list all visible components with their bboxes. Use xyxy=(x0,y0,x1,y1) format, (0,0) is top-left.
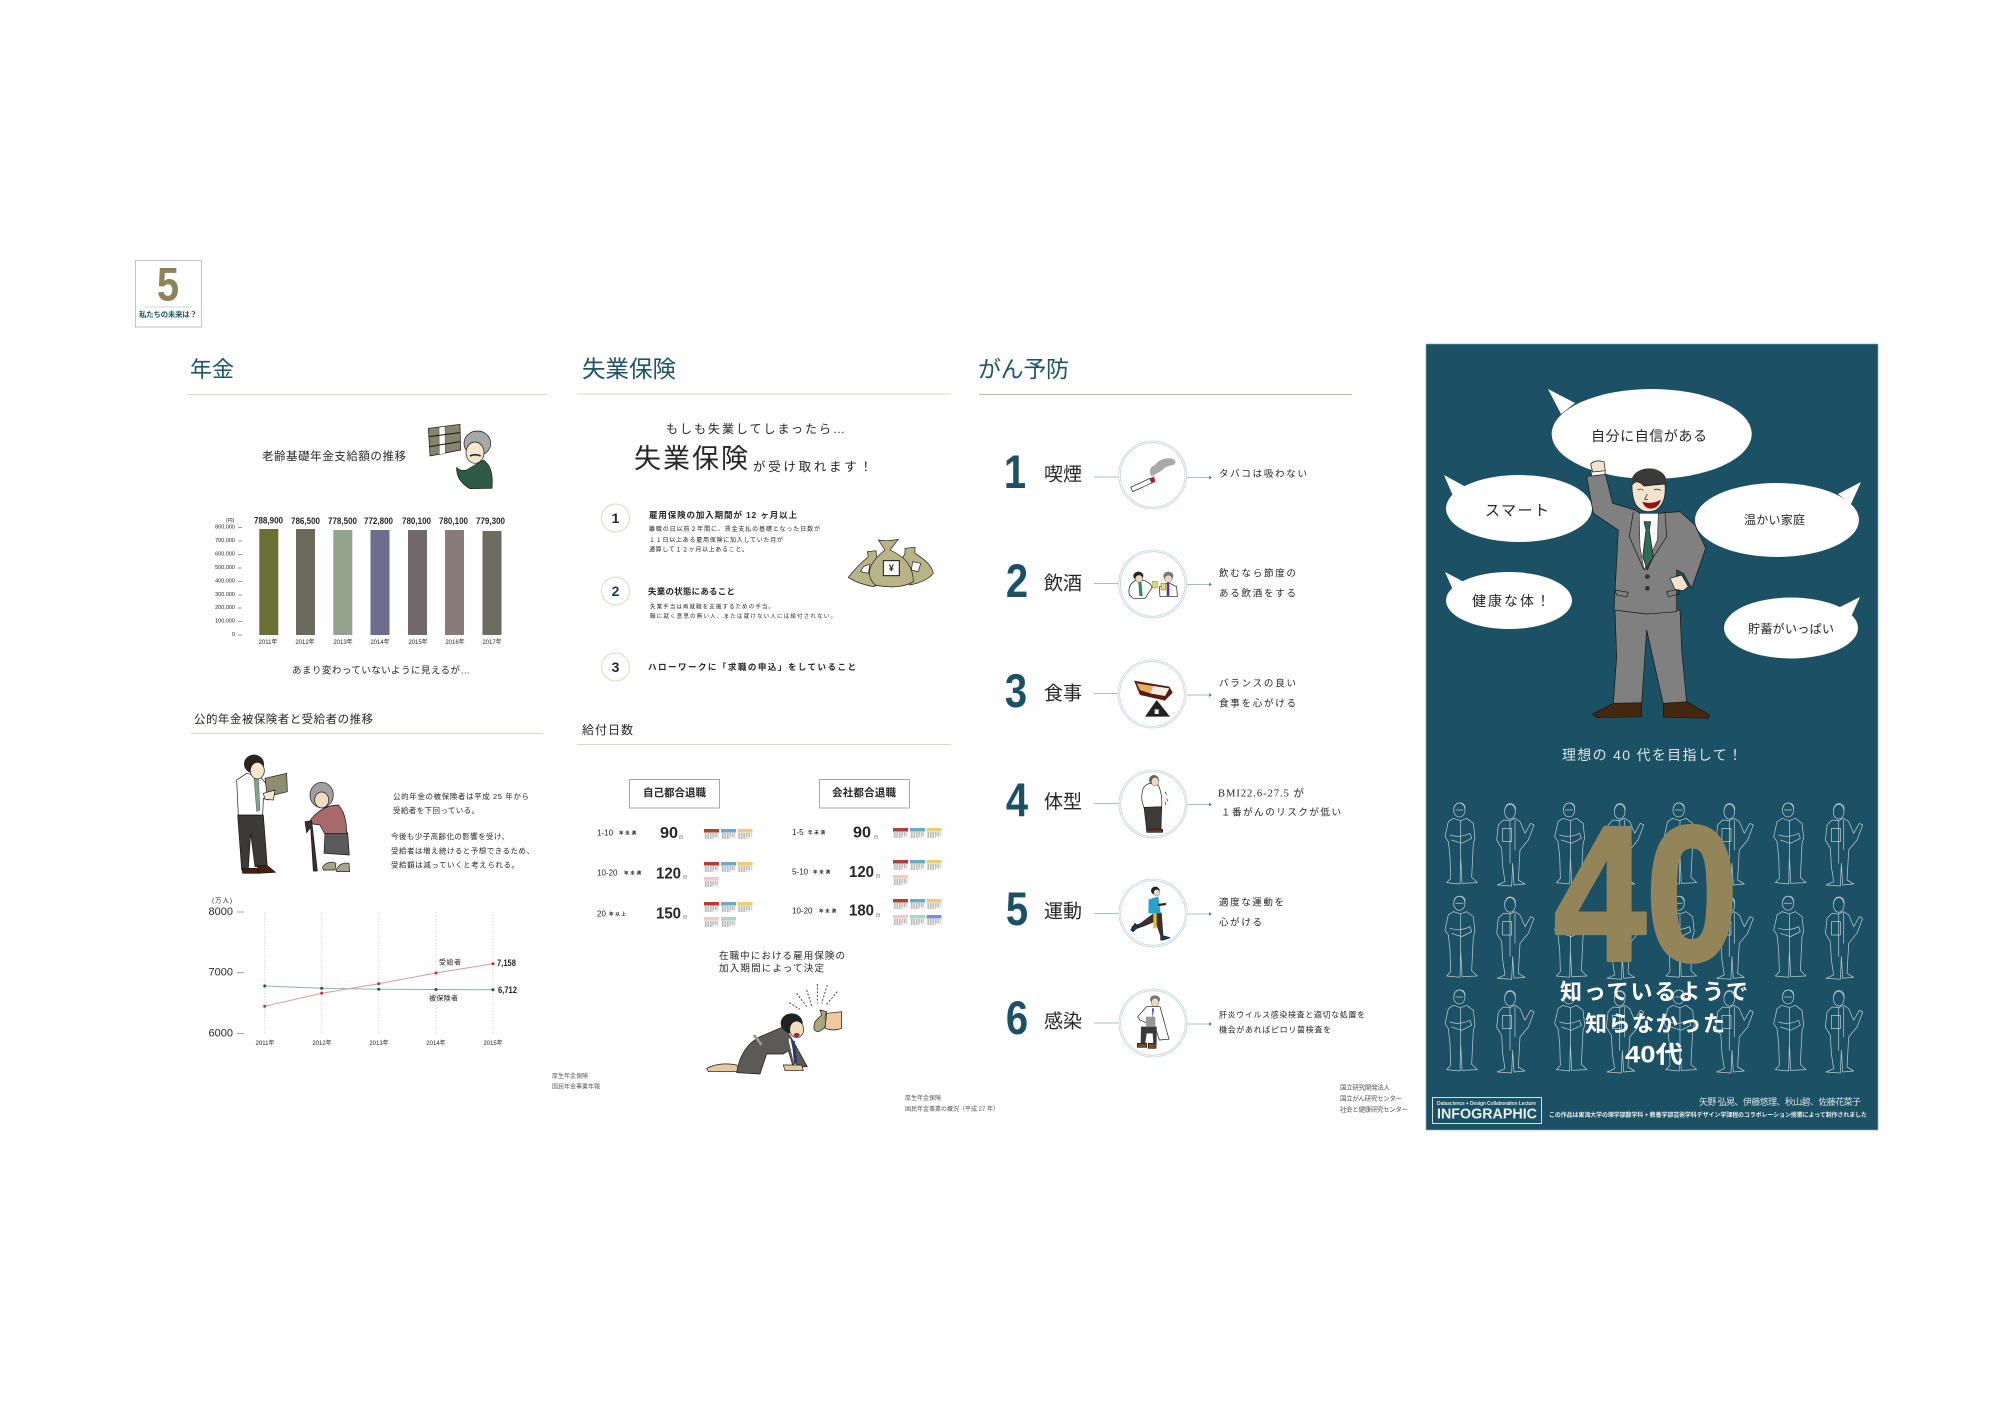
table: 自己都合退職: 90 xyxy=(660,825,678,842)
source: がん予防: 社会と健康研究センター xyxy=(1340,1104,1408,1114)
bar chart: 老齢基礎年金支給額: 400,000 xyxy=(215,578,235,584)
text: 飲むなら節度の: ある飲酒をする xyxy=(1219,588,1296,600)
text block: pension explanation xyxy=(391,791,534,870)
source: がん予防: 国立がん研究センター xyxy=(1340,1094,1402,1102)
condition 3: 3 xyxy=(612,659,620,675)
headline: 失業保険が受け取れます xyxy=(634,444,872,474)
icon: cigarette xyxy=(1131,458,1175,492)
table: 自己都合退職: 120 xyxy=(656,866,681,882)
table: 自己都合退職 xyxy=(597,780,752,927)
text: バランスの良い xyxy=(1219,678,1296,710)
text: バランスの良い: 食事を心がける xyxy=(1219,698,1296,710)
icon: money bags: ¥ xyxy=(889,563,895,573)
icon: runner xyxy=(1131,887,1170,940)
line chart: 被保険者と受給者: 被保険者 xyxy=(429,994,458,1002)
table: 会社都合退職 xyxy=(792,780,942,925)
subheading: 公的年金被保険者と受給者の推移: 公的年金被保険者と受給者の推移 xyxy=(194,712,374,726)
bar chart: 老齢基礎年金支給額: 772,800 xyxy=(364,516,393,526)
condition 1: 雇用保険の加入期間が 12 ヶ月以上 xyxy=(649,510,797,520)
section badge: 5 xyxy=(136,260,202,327)
row 3: 食事 xyxy=(1005,660,1296,728)
table: 会社都合退職: 日 xyxy=(874,834,878,840)
source: 失業保険: 国民年金事業の概況（平成 27 年） xyxy=(905,1105,999,1113)
table: 自己都合退職: 1-10 xyxy=(597,828,614,838)
bar chart: 老齢基礎年金支給額: 200,000 xyxy=(215,605,235,611)
table: 会社都合退職: 日 xyxy=(876,874,880,878)
text: 飲むなら節度の xyxy=(1219,568,1296,600)
source: 年金: 厚生年金保険 xyxy=(552,1072,588,1080)
panel: cover xyxy=(1426,344,1878,1130)
table: 会社都合退職: 10-20 xyxy=(792,906,813,916)
note: 加入期間によって決定: 在職中における雇用保険の xyxy=(719,950,845,962)
condition 2: 職に就く意思の無い人、または就けない人には給付されない。 xyxy=(650,612,836,620)
icon: money bags xyxy=(848,539,933,587)
heading: 年金: 年金 xyxy=(190,357,234,382)
row 4: 体型 xyxy=(1006,770,1341,838)
text: タバコは吸わない: タバコは吸わない xyxy=(1219,469,1307,480)
headline: 失業保険が受け取れます: が受け取れます！ xyxy=(753,459,872,474)
note: 加入期間によって決定 xyxy=(719,950,845,974)
bar chart: 老齢基礎年金支給額: 779,300 xyxy=(476,516,505,526)
speech bubble: スマート: スマート xyxy=(1485,502,1549,520)
bar chart: 老齢基礎年金支給額: 800,000 xyxy=(215,524,235,530)
line chart: 被保険者と受給者: 6,712 xyxy=(498,985,517,995)
text: 飲むなら節度の: 飲むなら節度の xyxy=(1219,568,1296,580)
big number: 40: 40 xyxy=(1554,786,1738,1001)
chart title: 老齢基礎年金支給額の推移: 老齢基礎年金支給額の推移 xyxy=(262,449,406,463)
source: がん予防 xyxy=(1340,1082,1408,1114)
pattern: line-art people xyxy=(1445,803,1863,1073)
bar chart: 老齢基礎年金支給額: 780,100 xyxy=(402,516,431,526)
source: がん予防: 国立研究開発法人 xyxy=(1340,1082,1390,1092)
line chart: 被保険者と受給者: 受給者 xyxy=(439,958,461,966)
speech bubble: 自分に自信がある xyxy=(1548,389,1752,479)
bar chart: 老齢基礎年金支給額: 700,000 xyxy=(215,538,235,544)
table: 会社都合退職: 会社都合退職 xyxy=(832,786,896,799)
title: 知っているようで知らなかった40代: 知っているようで xyxy=(1560,980,1748,1004)
line chart: 被保険者と受給者: 7,158 xyxy=(497,958,516,968)
line chart: 被保険者と受給者 xyxy=(209,896,517,1047)
table: 自己都合退職: 10-20 xyxy=(597,868,618,878)
source: 失業保険 xyxy=(905,1094,999,1113)
speech bubble: 自分に自信がある: 自分に自信がある xyxy=(1591,428,1707,444)
panel: 失業保険 xyxy=(577,356,999,1113)
table: 会社都合退職: 年未満 xyxy=(808,829,826,836)
text: BMI22.6-27.5 xyxy=(1218,786,1341,818)
table: 会社都合退職: 120 xyxy=(849,864,874,881)
row 5: 運動: 運動 xyxy=(1044,900,1082,922)
line chart: 被保険者と受給者: 2013年 xyxy=(369,1039,389,1047)
bar chart: 老齢基礎年金支給額: 100,000 xyxy=(215,618,235,624)
source: 失業保険: 厚生年金保険 xyxy=(905,1094,941,1102)
section badge: 5: 私たちの未来は？ xyxy=(139,309,197,319)
row 6: 感染: 感染 xyxy=(1044,1010,1082,1032)
row 1: 喫煙: 喫煙 xyxy=(1044,464,1082,486)
table: 自己都合退職: 年未満 xyxy=(624,870,642,876)
line chart: 被保険者と受給者: 2012年 xyxy=(312,1039,332,1047)
illustration: man crawling after money bag xyxy=(707,984,842,1074)
title: 知っているようで知らなかった40代: 知らなかった xyxy=(1585,1012,1725,1036)
table: 会社都合退職: 日 xyxy=(876,912,880,918)
speech bubble: 温かい家庭: 温かい家庭 xyxy=(1744,513,1805,527)
panel: 年金 xyxy=(187,357,600,1090)
condition 3 xyxy=(602,653,856,681)
subheading: 給付日数: 給付日数 xyxy=(582,722,633,737)
icon: overweight man xyxy=(1142,775,1168,832)
row 6: 感染 xyxy=(1006,989,1365,1057)
row 2: 飲酒 xyxy=(1006,550,1296,618)
table: 会社都合退職: 1-5 xyxy=(792,828,804,837)
condition 2: 失業手当は再就職を支援するための手当。 xyxy=(650,602,774,610)
line chart: 被保険者と受給者: 6000 xyxy=(209,1028,233,1040)
speech bubble: スマート xyxy=(1444,475,1592,542)
text: 適度な運動を: 心がける xyxy=(1219,916,1262,928)
title: 知っているようで知らなかった40代 xyxy=(1560,980,1748,1068)
text block: pension explanation: 受給者を下回っている。 xyxy=(393,805,479,815)
intro: もしも失業してしまったら: もしも失業してしまったら… xyxy=(666,421,845,436)
icon: two men drinking xyxy=(1129,572,1177,598)
row 4: 体型: 体型 xyxy=(1044,791,1082,813)
table: 会社都合退職: 90 xyxy=(853,824,871,842)
line chart: 被保険者と受給者: 8000 xyxy=(209,906,233,918)
headline: 失業保険が受け取れます: 失業保険 xyxy=(634,444,748,474)
table: 会社都合退職: 180 xyxy=(849,902,874,920)
logo: INFOGRAPHIC: INFOGRAPHIC xyxy=(1437,1106,1537,1122)
bar chart: 老齢基礎年金支給額: 788,900 xyxy=(254,516,283,526)
line chart: 被保険者と受給者: 2011年 xyxy=(256,1039,274,1047)
bar chart: 老齢基礎年金支給額: 786,500 xyxy=(291,516,320,526)
title: 知っているようで知らなかった40代: 40代 xyxy=(1625,1042,1683,1068)
table: 自己都合退職: 日 xyxy=(679,834,683,840)
speech bubble: 貯蓄がいっぱい: 貯蓄がいっぱい xyxy=(1748,621,1834,636)
text block: pension explanation: 受給者は増え続けると予想できるため、 xyxy=(391,846,534,856)
row 2: 飲酒: 飲酒 xyxy=(1044,572,1082,594)
text: BMI22.6-27.5: １番がんのリスクが低い xyxy=(1221,806,1341,818)
bar chart: 老齢基礎年金支給額: 0 xyxy=(232,632,235,638)
bar chart: 老齢基礎年金支給額 xyxy=(215,516,505,646)
text: BMI22.6-27.5: BMI22.6-27.5 が xyxy=(1218,786,1304,800)
bar chart: 老齢基礎年金支給額: 600,000 xyxy=(215,552,235,558)
line chart: 被保険者と受給者: (万人) xyxy=(212,896,232,904)
table: 自己都合退職: 自己都合退職 xyxy=(643,786,706,799)
condition 2: 失業の状態にあること xyxy=(648,586,735,596)
text: 適度な運動を: 適度な運動を xyxy=(1219,896,1284,908)
credits xyxy=(1549,1096,1867,1119)
row 5: 運動: 5 xyxy=(1006,884,1028,936)
text block: pension explanation: 公的年金の被保険者は平成 25 年から xyxy=(393,791,529,801)
table: 会社都合退職: 年未満 xyxy=(819,908,836,914)
section badge: 5: 5 xyxy=(157,260,179,311)
row 3: 食事: 3 xyxy=(1005,666,1027,718)
illustration: confident man in suit xyxy=(1587,461,1710,718)
credits: この作品は東海大学の理学部数学科 + 教養学部芸術学科デザイン学課程のコラボレーション授業によって制作されました xyxy=(1549,1111,1867,1119)
condition 1 xyxy=(602,504,820,554)
table: 自己都合退職: 150 xyxy=(656,906,681,922)
text block: pension explanation: 今後も少子高齢化の影響を受け、 xyxy=(391,831,509,841)
bar chart: 老齢基礎年金支給額: 2017年 xyxy=(482,638,502,646)
line chart: 被保険者と受給者: 7000 xyxy=(209,967,233,979)
table: 自己都合退職: 年以上 xyxy=(609,910,626,918)
bar chart: 老齢基礎年金支給額: 2013年 xyxy=(333,638,353,646)
icon: doctor xyxy=(1137,995,1169,1048)
bar chart: 老齢基礎年金支給額: 778,500 xyxy=(328,516,357,526)
table: 会社都合退職: 5-10 xyxy=(792,868,809,876)
icon: old man with money xyxy=(428,424,492,489)
condition 1: 通算して１２ヶ月以上あること。 xyxy=(649,546,748,554)
table: 自己都合退職: 日 xyxy=(683,874,687,880)
speech bubble: 健康な体 xyxy=(1445,572,1572,629)
table: 自己都合退職: 日 xyxy=(683,914,687,920)
row 1: 喫煙: 1 xyxy=(1004,447,1026,499)
logo: INFOGRAPHIC: Datascience + Design Collaboration Lecture xyxy=(1437,1101,1536,1107)
speech bubble: 健康な体: 健康な体！ xyxy=(1472,593,1550,609)
row 1: 喫煙 xyxy=(1004,441,1307,509)
note: あまり変わっていないように見えるが: あまり変わっていないように見えるが… xyxy=(292,664,470,676)
condition 1: １１日以上ある雇用保険に加入していた月が xyxy=(649,536,783,544)
condition 3: ハローワークに「求職の申込」をしていること xyxy=(648,662,856,672)
text: バランスの良い: バランスの良い xyxy=(1219,678,1296,690)
bar chart: 老齢基礎年金支給額: 2015年 xyxy=(408,638,428,646)
row 6: 感染: 6 xyxy=(1006,993,1028,1045)
text: 適度な運動を xyxy=(1219,896,1284,928)
heading: がん予防: がん予防 xyxy=(978,356,1069,382)
illustration: man handing money to elderly woman xyxy=(237,755,350,873)
heading: 失業保険: 失業保険 xyxy=(582,356,676,382)
row 4: 体型: 4 xyxy=(1006,775,1029,827)
text: 肝炎ウイルス感染検査 xyxy=(1219,1010,1365,1034)
panel: がん予防 xyxy=(978,356,1408,1114)
condition 1: 離職の日以前２年間に、賃金支払の基礎となった日数が xyxy=(649,525,820,533)
bar chart: 老齢基礎年金支給額: 500,000 xyxy=(215,565,235,571)
row 5: 運動 xyxy=(1006,879,1284,947)
condition 1: 1 xyxy=(612,510,620,526)
text block: pension explanation: 受給額は減っていくと考えられる。 xyxy=(391,860,519,870)
speech bubble: 温かい家庭 xyxy=(1695,482,1861,557)
bar chart: 老齢基礎年金支給額: (円) xyxy=(226,518,235,524)
text: 肝炎ウイルス感染検査: 肝炎ウイルス感染検査と適切な処置を xyxy=(1219,1010,1365,1020)
row 3: 食事: 食事 xyxy=(1044,682,1082,704)
table: 自己都合退職: 20 xyxy=(597,910,606,918)
bar chart: 老齢基礎年金支給額: 780,100 xyxy=(439,516,468,526)
speech bubble: 貯蓄がいっぱい xyxy=(1724,597,1860,658)
bar chart: 老齢基礎年金支給額: 2016年 xyxy=(445,638,465,646)
caption: 理想の40代を目指して: 理想の 40 代を目指して！ xyxy=(1562,747,1742,763)
source: 年金 xyxy=(552,1072,600,1090)
condition 2: 2 xyxy=(612,583,620,599)
table: 会社都合退職: 年未満 xyxy=(813,868,830,876)
condition 2 xyxy=(602,577,836,620)
line chart: 被保険者と受給者: 2014年 xyxy=(426,1039,446,1047)
text: 肝炎ウイルス感染検査: 機会があればピロリ菌検査を xyxy=(1219,1024,1331,1034)
table: 自己都合退職: 年未満 xyxy=(619,830,636,836)
credits: 矢野 弘晃、伊藤悠理、秋山碧、佐藤花菜子 xyxy=(1699,1096,1861,1107)
row 2: 飲酒: 2 xyxy=(1006,556,1028,608)
icon: balanced meal xyxy=(1134,681,1173,717)
logo: INFOGRAPHIC xyxy=(1432,1098,1542,1124)
bar chart: 老齢基礎年金支給額: 2011年 xyxy=(259,638,277,646)
bar chart: 老齢基礎年金支給額: 300,000 xyxy=(215,592,235,598)
bar chart: 老齢基礎年金支給額: 2014年 xyxy=(370,638,390,646)
line chart: 被保険者と受給者: 2015年 xyxy=(483,1039,503,1047)
note: 加入期間によって決定: 加入期間によって決定 xyxy=(719,962,824,974)
source: 年金: 国民年金事業年報 xyxy=(552,1082,600,1090)
bar chart: 老齢基礎年金支給額: 2012年 xyxy=(295,638,315,646)
